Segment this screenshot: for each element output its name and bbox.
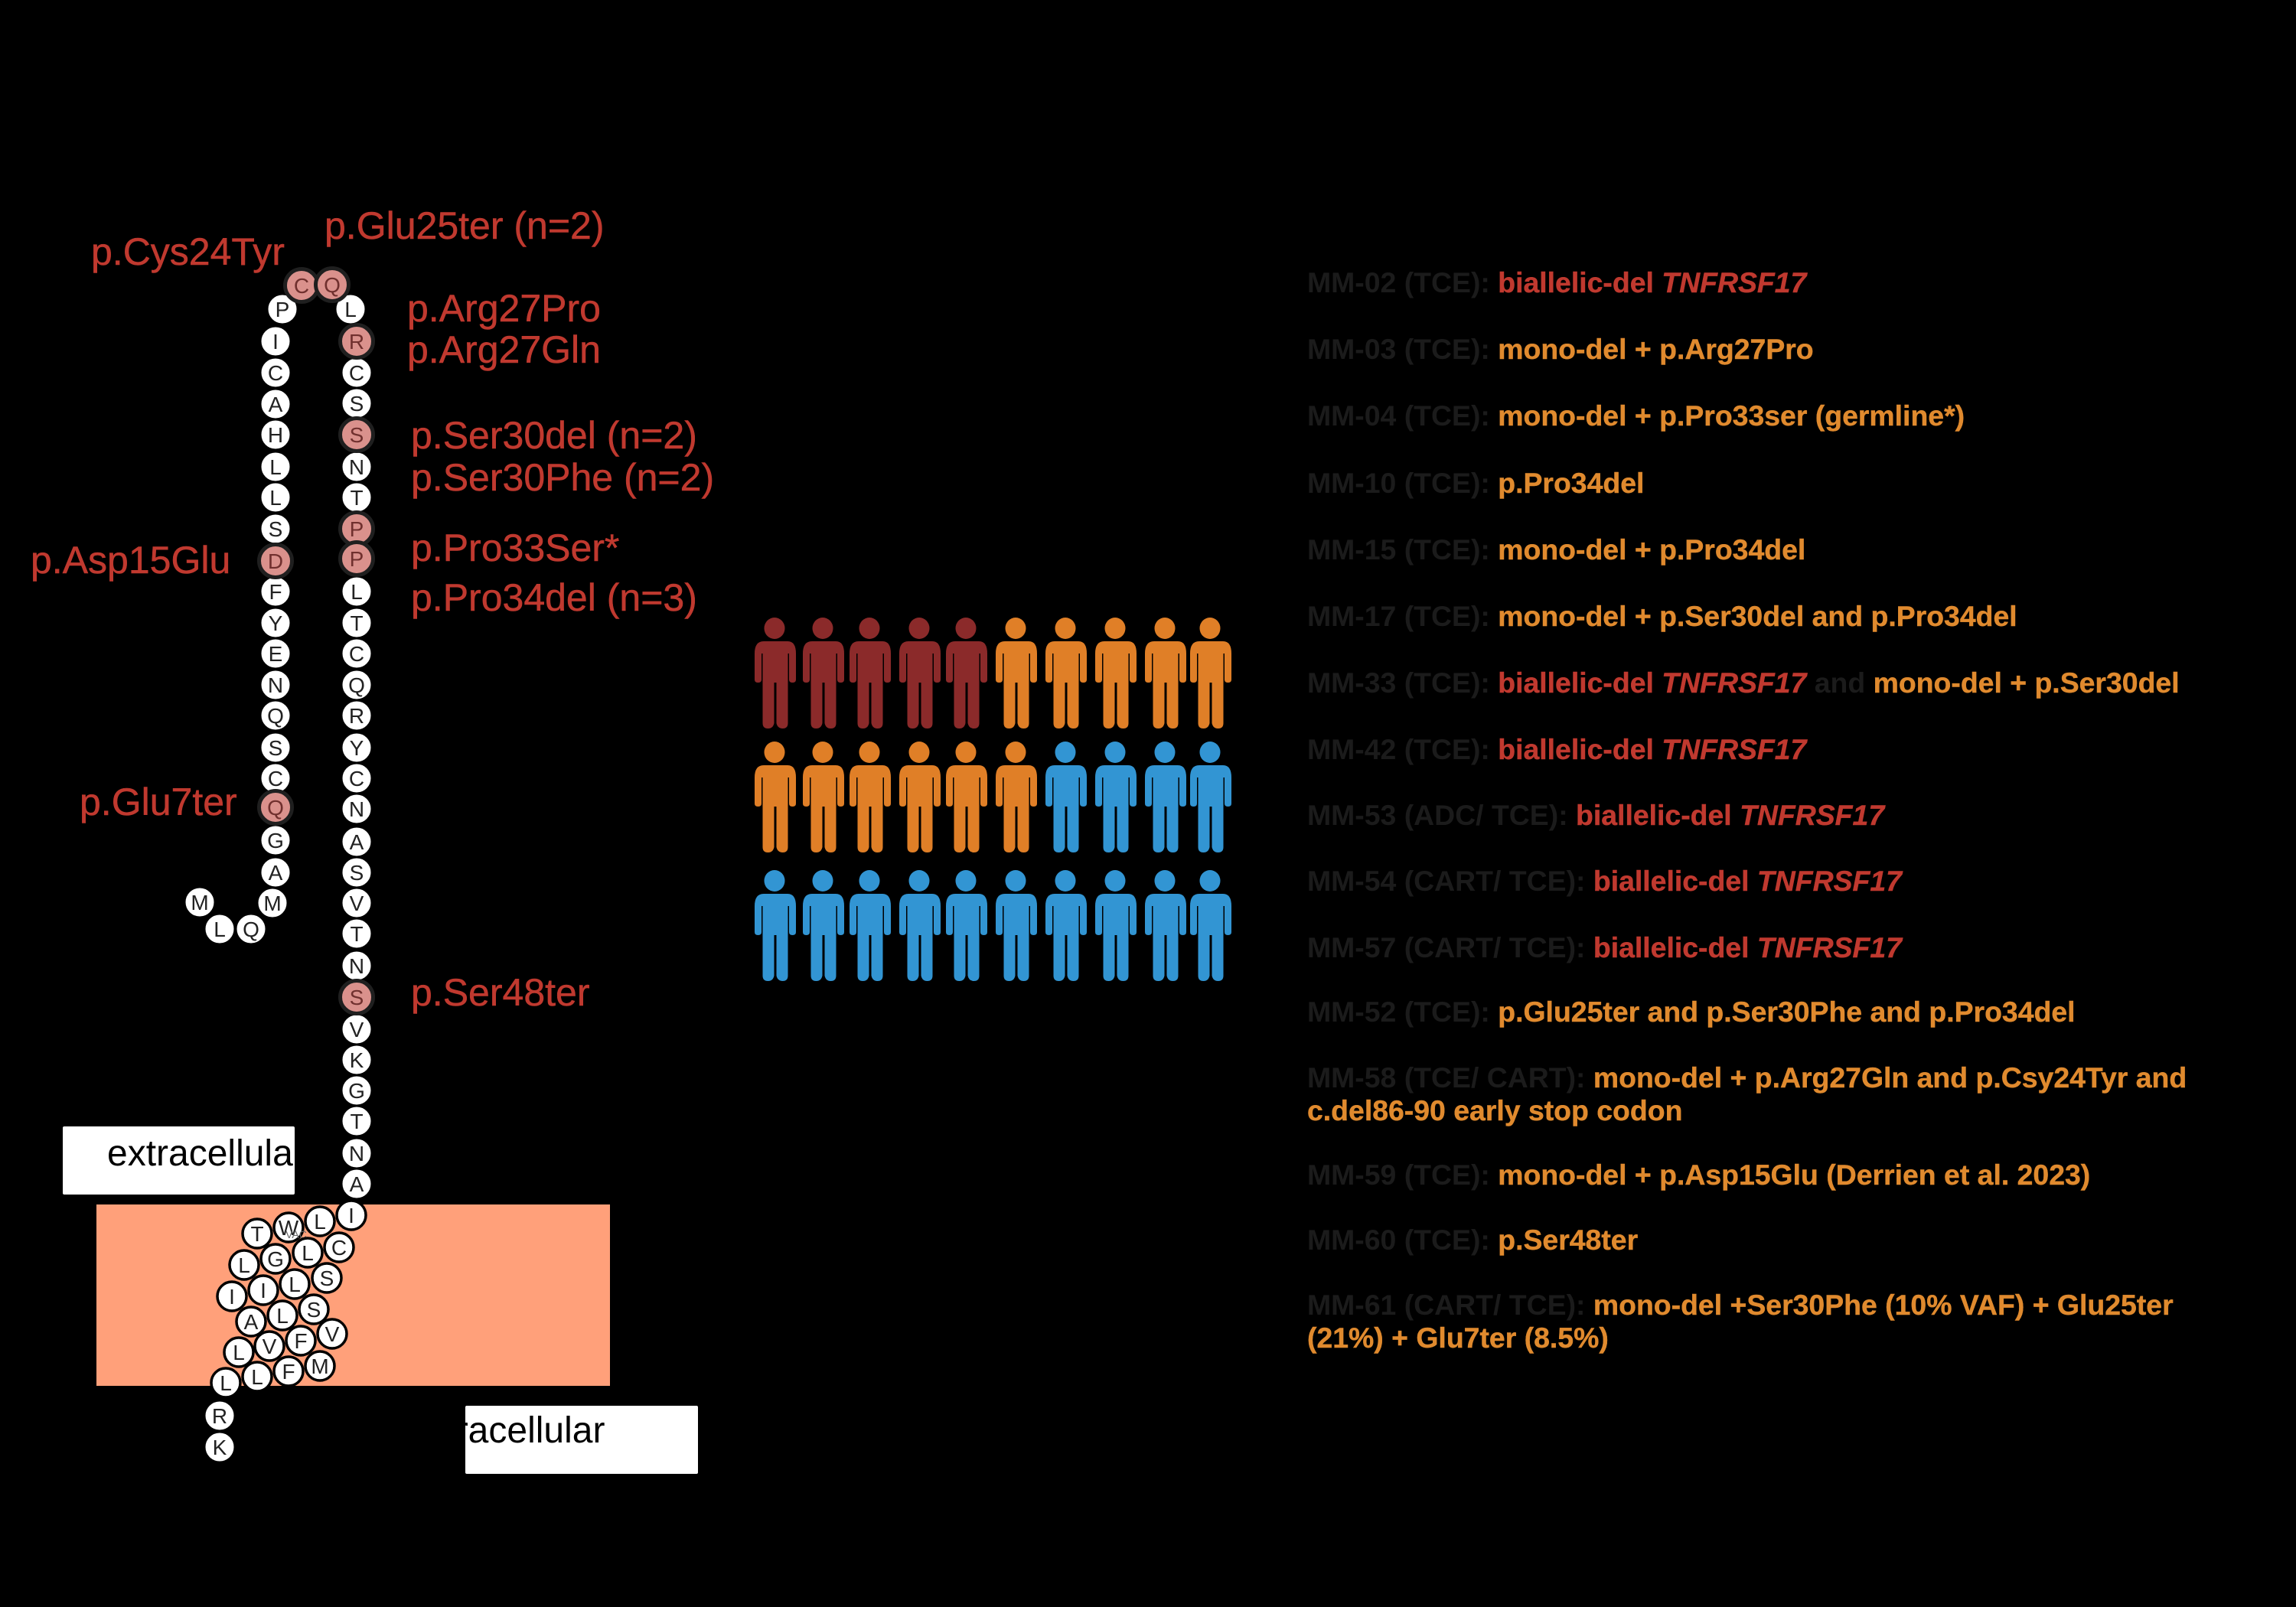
list entry MM-58: MM-58 (TCE/ CART): mono-del + p.Arg27Gln and p.Csy24Tyr and — [1307, 1061, 2187, 1094]
residues: N-terminal hook and left column: L — [214, 918, 226, 941]
residues: transmembrane helix: C — [331, 1236, 347, 1260]
residues: transmembrane helix: VAC — [285, 1228, 307, 1240]
intracellular label: intracellular — [417, 1410, 605, 1451]
residues: transmembrane helix: A — [244, 1310, 259, 1334]
residues: right column: C — [349, 361, 364, 385]
residues: right column: Y — [350, 736, 364, 760]
intracellular label — [417, 1406, 698, 1474]
residues: right column: N — [349, 1142, 364, 1165]
residues: transmembrane helix: F — [294, 1329, 308, 1353]
residues: N-terminal hook and left column: L — [269, 455, 282, 479]
residues: transmembrane helix: L — [302, 1241, 314, 1265]
residues: N-terminal hook and left column: A — [269, 861, 283, 885]
residues: right column: T — [350, 1110, 364, 1133]
residues: transmembrane helix: I — [229, 1285, 235, 1309]
extracellular label: extracellular — [107, 1133, 305, 1174]
list entry MM-10: MM-10 (TCE): p.Pro34del — [1307, 467, 1644, 499]
residues: right column: T — [350, 486, 364, 510]
list entry MM-04: MM-04 (TCE): mono-del + p.Pro33ser (germline*) — [1307, 399, 1965, 432]
residues: N-terminal hook and left column: S — [269, 517, 282, 541]
residues: mutated positions highlighted — [259, 268, 373, 1013]
residues: transmembrane helix: W — [279, 1216, 299, 1240]
residues: N-terminal hook and left column: C — [268, 767, 283, 790]
people row 1: 5 red, 5 orange — [755, 618, 1231, 729]
residues: N-terminal hook and left column: G — [267, 829, 284, 852]
list entry MM-61: (21%) + Glu7ter (8.5%) — [1307, 1322, 1609, 1354]
residues: transmembrane helix: V — [263, 1335, 277, 1358]
residues: right column: N — [349, 954, 364, 978]
panel: patient mutation list — [1307, 266, 2187, 1354]
list entry MM-57: MM-57 (CART/ TCE): biallelic-del TNFRSF17 — [1307, 931, 1903, 963]
list entry MM-17: MM-17 (TCE): mono-del + p.Ser30del and p.Pro34del — [1307, 600, 2017, 632]
residues: transmembrane helix: L — [276, 1304, 289, 1328]
residues: right column: V — [350, 892, 364, 915]
residues: N-terminal hook and left column: M — [191, 891, 209, 914]
residues: N-terminal hook and left column: F — [269, 580, 282, 604]
list entry MM-52: MM-52 (TCE): p.Glu25ter and p.Ser30Phe and p.Pro34del — [1307, 996, 2076, 1028]
residues: transmembrane helix: L — [233, 1341, 245, 1364]
residues: right column: Q — [348, 673, 365, 697]
residues: transmembrane helix: F — [282, 1360, 295, 1384]
list entry MM-15: MM-15 (TCE): mono-del + p.Pro34del — [1307, 533, 1805, 566]
residues: N-terminal hook and left column: N — [268, 673, 283, 697]
residues: right column: V — [350, 1018, 364, 1041]
residues: transmembrane helix: M — [311, 1354, 329, 1378]
mutation label: p.Pro34del (n=3) — [411, 576, 697, 619]
people row 3: 10 blue — [755, 870, 1231, 981]
residues: right column: N — [349, 455, 364, 479]
membrane band — [96, 1204, 610, 1386]
mutation label: p.Glu7ter — [80, 781, 237, 823]
residues: intracellular tail — [205, 1401, 234, 1462]
mutation label: p.Ser30del (n=2) — [411, 414, 697, 457]
list entry MM-33: MM-33 (TCE): biallelic-del TNFRSF17 and mono-del + p.Ser30del — [1307, 667, 2180, 699]
list entry MM-42: MM-42 (TCE): biallelic-del TNFRSF17 — [1307, 733, 1808, 765]
residues: right column: C — [349, 767, 364, 790]
residues: right column: L — [344, 298, 357, 321]
residues: mutated positions highlighted: D — [268, 549, 283, 573]
list entry MM-60: MM-60 (TCE): p.Ser48ter — [1307, 1224, 1638, 1256]
residues: mutated positions highlighted: S — [350, 986, 364, 1009]
list entry MM-59: MM-59 (TCE): mono-del + p.Asp15Glu (Derrien et al. 2023) — [1307, 1159, 2090, 1191]
residues: mutated positions highlighted: P — [350, 547, 364, 571]
people row 2: 6 orange, 4 blue — [755, 742, 1231, 852]
residues: N-terminal hook and left column: A — [269, 393, 283, 416]
residues: N-terminal hook and left column: E — [269, 642, 282, 666]
residues: right column — [336, 295, 371, 1198]
list entry MM-61: MM-61 (CART/ TCE): mono-del +Ser30Phe (10% VAF) + Glu25ter — [1307, 1289, 2174, 1321]
residues: transmembrane helix: L — [220, 1371, 232, 1395]
residues: N-terminal hook and left column — [185, 295, 297, 944]
mutation label: p.Cys24Tyr — [91, 230, 285, 273]
residues: N-terminal hook and left column: M — [263, 892, 282, 915]
residues: right column: A — [350, 830, 364, 854]
mutation label: p.Ser48ter — [411, 971, 589, 1014]
residues: right column: T — [350, 611, 364, 635]
list entry MM-54: MM-54 (CART/ TCE): biallelic-del TNFRSF17 — [1307, 865, 1903, 897]
residues: transmembrane helix: I — [260, 1279, 266, 1302]
panel: patient pictogram — [755, 618, 1231, 981]
residues: right column: T — [350, 922, 364, 946]
list entry MM-03: MM-03 (TCE): mono-del + p.Arg27Pro — [1307, 333, 1814, 365]
panel: protein topology — [31, 204, 714, 1474]
residues: N-terminal hook and left column: L — [269, 486, 282, 510]
residues: mutated positions highlighted: C — [294, 274, 309, 298]
residues: intracellular tail: K — [213, 1436, 227, 1459]
mutation label: p.Asp15Glu — [31, 539, 230, 582]
residues: N-terminal hook and left column: C — [268, 361, 283, 385]
mutation label: p.Glu25ter (n=2) — [325, 204, 604, 247]
mutation label: p.Ser30Phe (n=2) — [411, 456, 714, 499]
residues: N-terminal hook and left column: Q — [267, 704, 284, 728]
residues: mutated positions highlighted: S — [350, 423, 364, 447]
residues: mutated positions highlighted: P — [350, 517, 364, 541]
residues: N-terminal hook and left column: Q — [243, 918, 259, 941]
residues: mutated positions highlighted: R — [349, 330, 364, 354]
residues: right column: S — [350, 861, 364, 885]
mutation label: p.Arg27Pro — [407, 287, 601, 330]
residues: right column: N — [349, 797, 364, 821]
extracellular label — [63, 1126, 305, 1195]
residues: right column: C — [349, 642, 364, 666]
list entry MM-58: c.del86-90 early stop codon — [1307, 1094, 1682, 1126]
residues: right column: K — [350, 1048, 364, 1072]
residues: transmembrane helix: V — [325, 1322, 340, 1346]
residues: transmembrane helix: I — [348, 1204, 354, 1227]
residues: transmembrane helix: T — [250, 1222, 264, 1246]
residues: mutated positions highlighted: Q — [267, 796, 284, 820]
residues: transmembrane helix: S — [307, 1298, 321, 1322]
residues: right column: G — [348, 1079, 365, 1103]
residues: N-terminal hook and left column: P — [276, 298, 289, 321]
list entry MM-53: MM-53 (ADC/ TCE): biallelic-del TNFRSF17 — [1307, 799, 1886, 831]
residues: transmembrane helix — [211, 1201, 366, 1397]
residues: transmembrane helix: G — [267, 1247, 284, 1271]
residues: N-terminal hook and left column: S — [269, 736, 282, 760]
mutation label: p.Pro33Ser* — [411, 526, 619, 569]
residues: transmembrane helix: L — [314, 1210, 326, 1234]
residues: transmembrane helix: L — [238, 1253, 250, 1277]
residues: right column: L — [351, 580, 363, 604]
residues: N-terminal hook and left column: Y — [269, 611, 283, 635]
residues: transmembrane helix: S — [320, 1266, 334, 1290]
mutation label: p.Arg27Gln — [407, 328, 601, 371]
list entry MM-02: MM-02 (TCE): biallelic-del TNFRSF17 — [1307, 266, 1808, 298]
residues: intracellular tail: R — [212, 1404, 227, 1428]
residues: transmembrane helix: L — [289, 1273, 301, 1296]
residues: transmembrane helix: L — [251, 1365, 263, 1389]
residues: mutated positions highlighted: Q — [324, 273, 341, 297]
residues: right column: A — [350, 1172, 364, 1196]
residues: N-terminal hook and left column: I — [272, 330, 279, 354]
residues: right column: R — [349, 704, 364, 728]
residues: N-terminal hook and left column: H — [268, 423, 283, 447]
residues: right column: S — [350, 392, 364, 416]
